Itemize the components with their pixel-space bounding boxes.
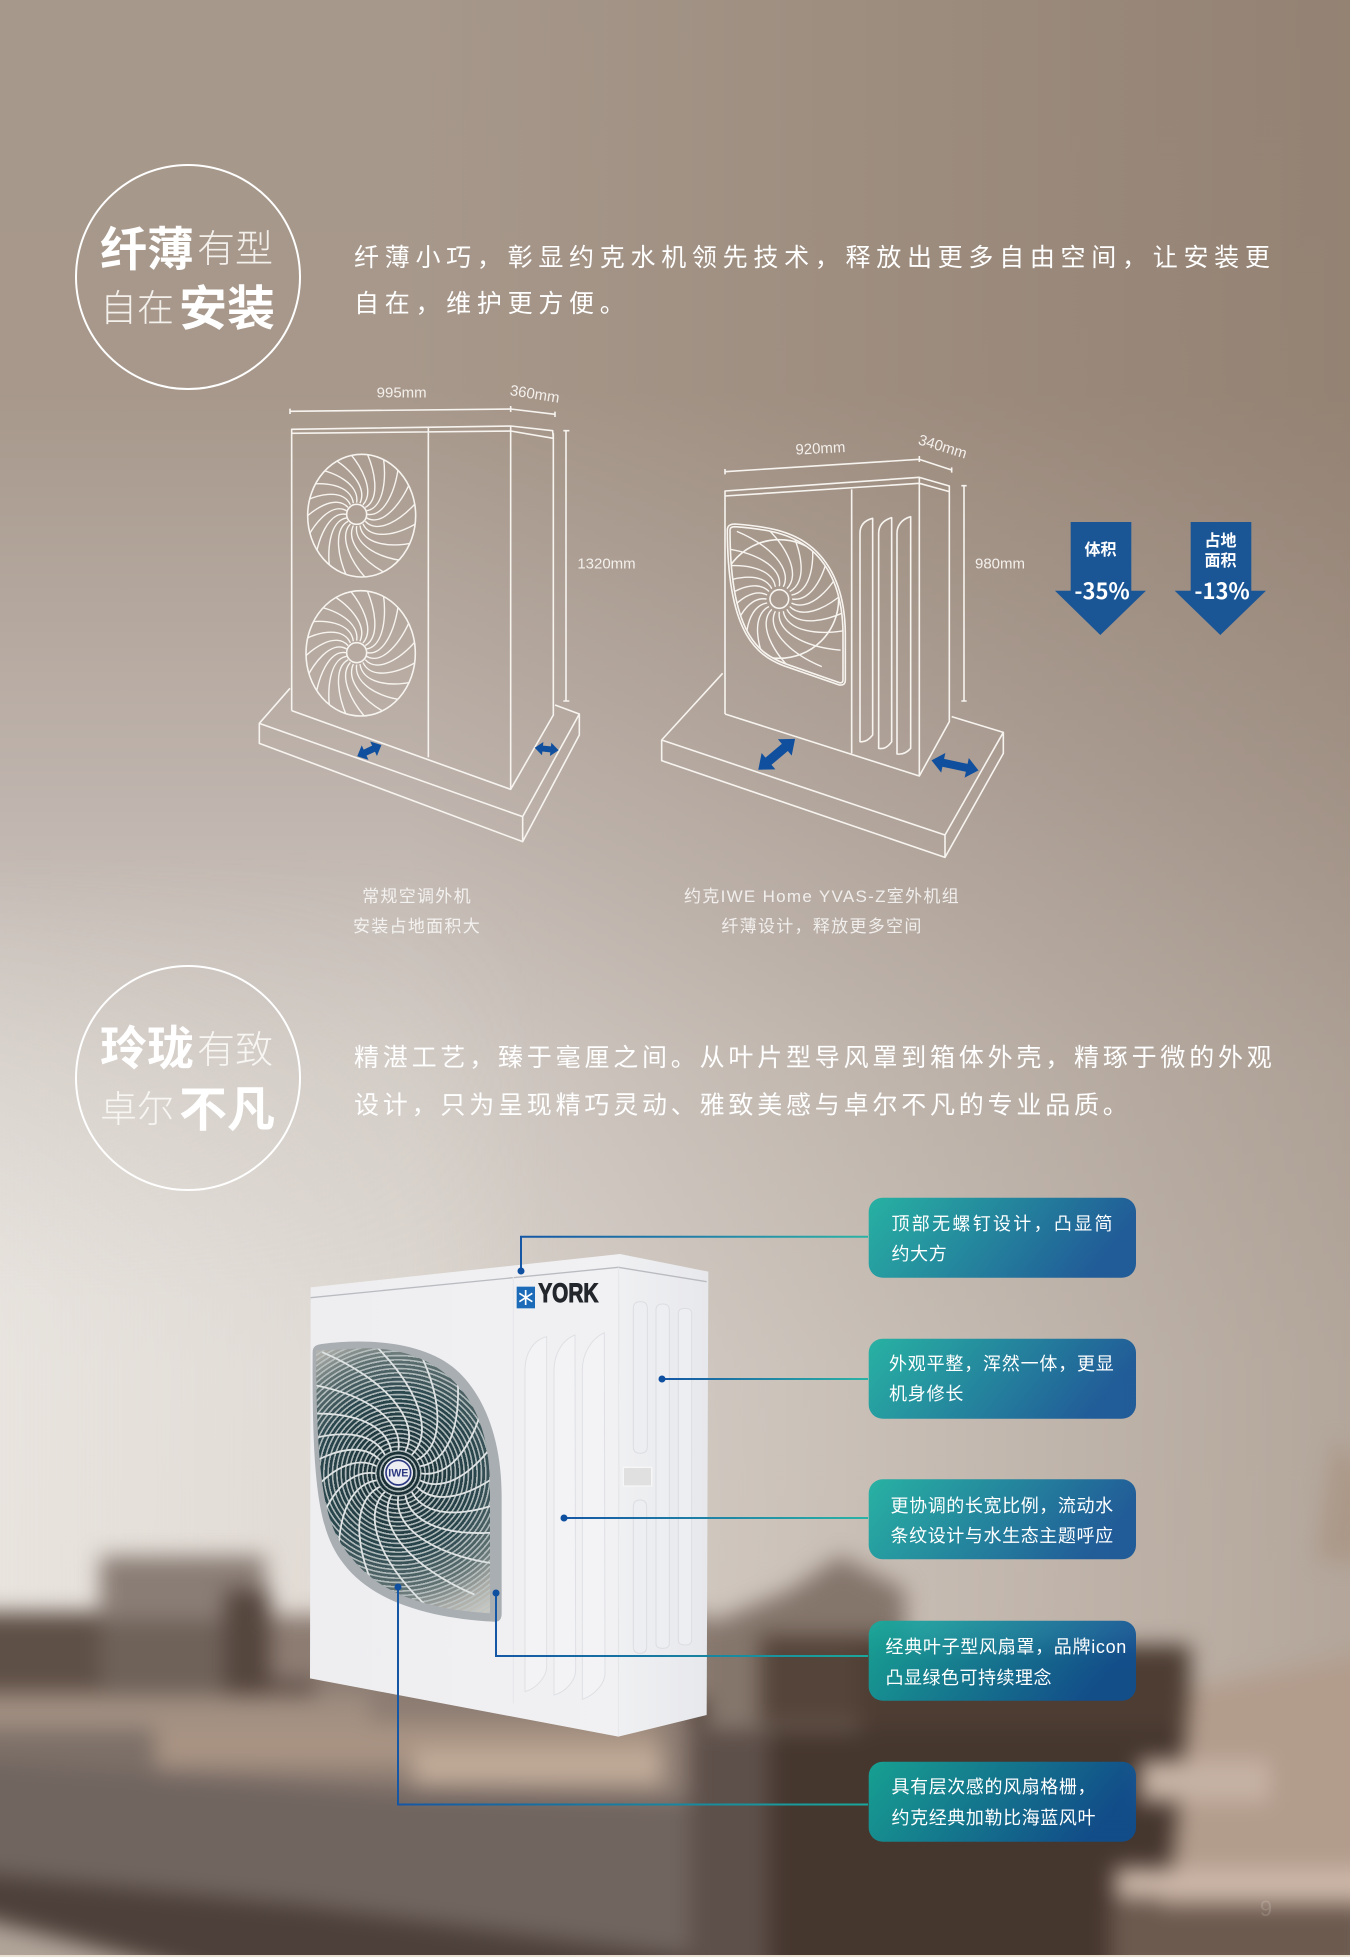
caption: YORK unit: 约克IWE Home YVAS-Z室外机组 — [684, 887, 960, 906]
hub badge: IWE — [388, 1468, 408, 1480]
dimension labels: 340mm — [916, 432, 969, 462]
caption: conventional unit: 常规空调外机 — [362, 887, 472, 906]
callout 1 — [869, 1198, 1136, 1278]
caption: conventional unit — [353, 887, 481, 936]
blue depth arrows — [751, 731, 981, 780]
arrow badge: volume -35%: -35% — [1074, 574, 1130, 606]
fan top — [306, 454, 416, 578]
caption: YORK unit — [684, 887, 960, 936]
handle — [623, 1467, 652, 1486]
badge: 纤薄有型 自在安装: 自在 — [100, 288, 174, 329]
callout 2: 机身修长 — [889, 1384, 964, 1404]
callout 5: 具有层次感的风扇格栅， — [892, 1777, 1096, 1797]
badge: 玲珑有致 卓尔不凡: 不凡 — [179, 1084, 275, 1137]
YORK logo: YORK — [538, 1278, 598, 1308]
badge: 纤薄有型 自在安装: 有型 — [197, 229, 273, 271]
callout connector 2 — [658, 1376, 868, 1382]
arrow badge: footprint -13%: 占地 — [1204, 527, 1237, 551]
callout connector 5 — [394, 1584, 868, 1804]
dimension labels: 920mm — [795, 439, 846, 459]
intro paragraph: section 2: 精湛工艺，臻于毫厘之间。从叶片型导风罩到箱体外壳，精琢于微的外观 — [354, 1044, 1276, 1072]
dimension labels: 360mm — [509, 382, 561, 407]
fan shroud — [313, 1342, 502, 1622]
badge: 纤薄有型 自在安装: 安装 — [179, 283, 275, 336]
callout connector 4 — [492, 1590, 868, 1656]
blue depth arrows — [354, 738, 559, 764]
dimension labels — [795, 432, 1025, 572]
arrow badge: footprint -13%: -13% — [1194, 574, 1250, 606]
dimension lines — [725, 456, 967, 701]
caption: YORK unit: 纤薄设计，释放更多空间 — [721, 917, 923, 936]
callout 3 — [869, 1479, 1136, 1559]
caption: conventional unit: 安装占地面积大 — [353, 917, 481, 936]
fan grille — [316, 1348, 490, 1614]
diagram: YORK slim outdoor unit — [662, 432, 1025, 857]
fan bottom — [305, 590, 416, 717]
callout 5: 约克经典加勒比海蓝风叶 — [892, 1808, 1096, 1828]
page number: 9 — [1260, 1896, 1272, 1921]
callout 5 — [869, 1762, 1136, 1842]
product photo: YORK outdoor unit — [310, 1254, 708, 1737]
badge: 玲珑有致 卓尔不凡: 玲珑 — [100, 1022, 194, 1075]
side vents — [860, 517, 911, 754]
side vents — [633, 1302, 692, 1653]
callout connector 3 — [560, 1514, 868, 1522]
callout 3: 更协调的长宽比例，流动水 — [890, 1496, 1114, 1516]
badge: 玲珑有致 卓尔不凡: 有致 — [197, 1030, 273, 1072]
dimension labels: 995mm — [377, 384, 427, 401]
badge: 玲珑有致 卓尔不凡 — [76, 966, 300, 1190]
diagram: conventional outdoor unit — [259, 382, 636, 842]
badge: 纤薄有型 自在安装: 纤薄 — [100, 223, 194, 276]
callout 3: 条纹设计与水生态主题呼应 — [890, 1526, 1114, 1546]
intro paragraph: section 1 — [354, 244, 1276, 318]
intro paragraph: section 2: 设计，只为呈现精巧灵动、雅致美感与卓尔不凡的专业品质。 — [354, 1092, 1132, 1120]
front vents — [525, 1333, 605, 1699]
badge: 玲珑有致 卓尔不凡: 卓尔 — [100, 1089, 174, 1130]
fan shroud and blades — [726, 523, 846, 686]
base slab — [259, 688, 579, 842]
arrow badge: footprint -13% — [1175, 522, 1266, 635]
callout 4: 凸显绿色可持续理念 — [886, 1667, 1052, 1688]
dimension labels — [377, 382, 636, 572]
intro paragraph: section 2 — [354, 1044, 1276, 1120]
callout 1: 顶部无螺钉设计，凸显简 — [892, 1214, 1115, 1234]
dimension labels: 980mm — [975, 555, 1025, 572]
callout connector 1 — [518, 1237, 868, 1274]
callout 2: 外观平整，浑然一体，更显 — [889, 1354, 1115, 1374]
arrow badge: footprint -13%: 面积 — [1204, 547, 1237, 571]
arrow badge: volume -35% — [1055, 522, 1146, 635]
badge: 纤薄有型 自在安装 — [76, 165, 300, 389]
dimension labels: 1320mm — [577, 555, 636, 572]
arrow badge: volume -35%: 体积 — [1084, 536, 1117, 560]
callout 4 — [869, 1621, 1136, 1701]
hub badge — [384, 1458, 413, 1487]
dimension lines — [290, 406, 569, 701]
intro paragraph: section 1: 纤薄小巧，彰显约克水机领先技术，释放出更多自由空间，让安装更 — [354, 244, 1276, 272]
callout 2 — [869, 1339, 1136, 1419]
YORK logo — [517, 1278, 598, 1308]
callout 1: 约大方 — [892, 1244, 947, 1264]
callout 4: 经典叶子型风扇罩，品牌icon — [886, 1637, 1127, 1657]
intro paragraph: section 1: 自在，维护更方便。 — [354, 290, 630, 318]
base slab — [662, 673, 1003, 857]
